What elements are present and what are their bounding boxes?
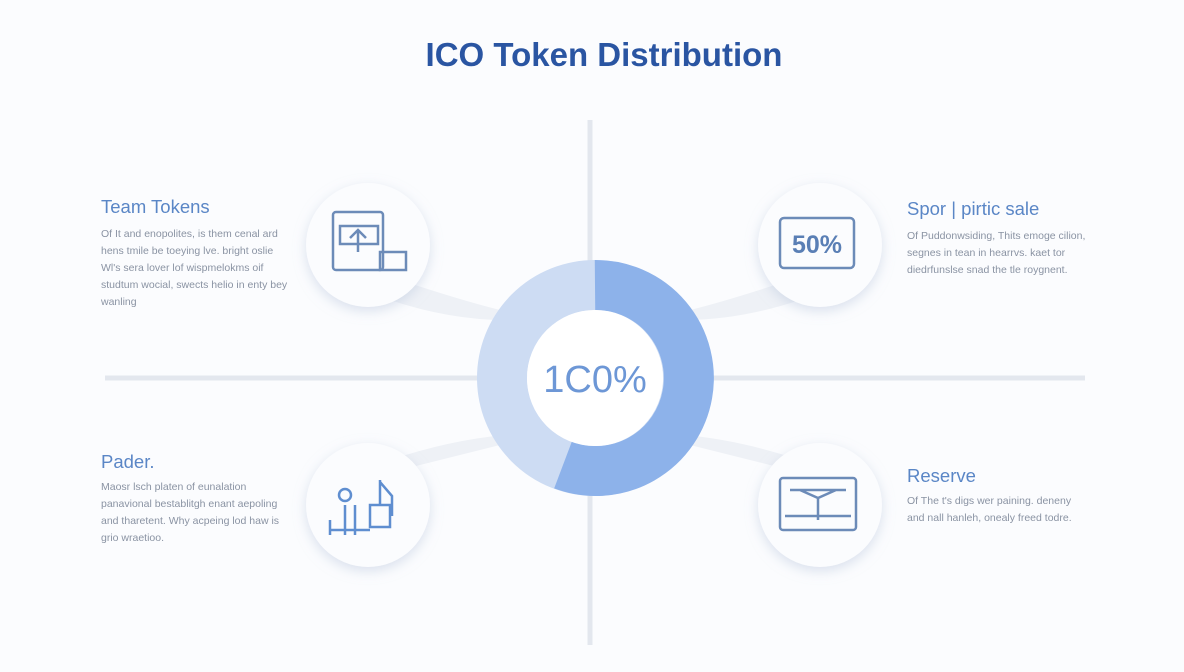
icon: team: [333, 212, 406, 270]
icon: 50%: [780, 218, 854, 268]
icon: pader: [330, 480, 392, 535]
title: ICO Token Distribution: [426, 36, 782, 73]
text: team: Of It and enopolites, is them cenal ard hens tmile be toeying lve. bright oslie Wl's sera lover lof wispmelokms oif studtum wocial, swects helio in enty bey wanling: [101, 228, 287, 308]
icon: reserve: [780, 478, 856, 530]
connectors: [390, 280, 800, 470]
text: reserve: Of The t's digs wer paining. deneny and nall hanleh, onealy freed todre.: [907, 495, 1072, 524]
donut chart: [502, 285, 689, 471]
donut chart: 1C0%: [543, 359, 647, 401]
text: public sale: Of Puddonwsiding, Thits emoge cilion, segnes in tean in hearrvs. kaet tor diedrfunslse snad the tle roygnent.: [907, 230, 1085, 276]
heading: pader: Pader.: [101, 451, 154, 472]
heading: reserve: Reserve: [907, 465, 976, 486]
heading: team tokens: Team Tokens: [101, 196, 210, 217]
text: pader: Maosr lsch platen of eunalation panavional bestablitgh enant aepoling and tharetent. Why acpeing lod haw is grio wraetioo.: [101, 481, 279, 544]
icon circles: [306, 183, 882, 567]
heading: public sale: Spor | pirtic sale: [907, 198, 1039, 219]
icon: 50%: 50%: [792, 231, 842, 259]
